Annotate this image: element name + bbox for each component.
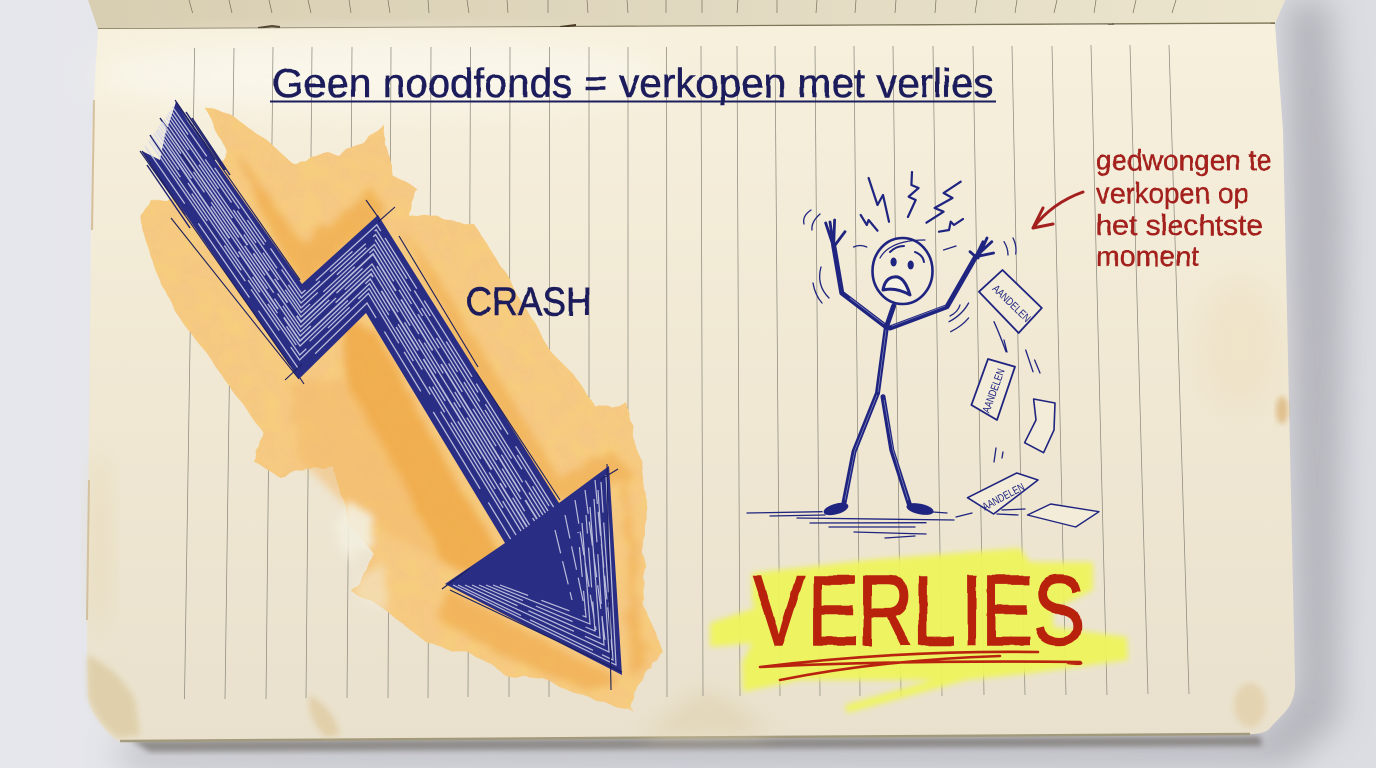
red annotation	[1096, 145, 1272, 273]
red annotation: verkopen op	[1096, 178, 1249, 210]
falling paper: blank	[1025, 399, 1055, 453]
body pen highlights	[845, 298, 945, 500]
figure body	[834, 245, 976, 505]
ground scribbles	[747, 509, 1025, 538]
title: Geen noodfonds = verkopen met verlies	[272, 60, 994, 106]
red underline strokes	[760, 652, 1081, 680]
red annotation: gedwongen te	[1096, 145, 1272, 177]
red annotation: het slechtste	[1096, 210, 1263, 242]
feet	[823, 501, 934, 517]
ruled vertical lines	[184, 45, 1189, 699]
hands	[826, 220, 994, 258]
label: crash: CRASH	[466, 280, 592, 324]
arrow hatch highlights	[145, 107, 554, 539]
panicking stick figure	[747, 172, 1040, 538]
crash arrow	[140, 100, 622, 690]
fallen paper: shares 3: AANDELEN	[980, 481, 1027, 513]
head and face	[872, 238, 932, 304]
orange watercolor wash	[137, 110, 664, 710]
tail spikes	[142, 102, 230, 228]
arrow head hatching	[453, 475, 616, 665]
falling paper: shares 2	[971, 359, 1015, 420]
red annotation: moment	[1096, 241, 1199, 273]
fallen paper: blank	[1028, 504, 1099, 527]
falling paper: shares 1: AANDELEN	[990, 283, 1033, 325]
red arrow to figure	[1033, 192, 1083, 228]
arrow body	[142, 102, 622, 675]
falling paper: shares 1	[979, 270, 1042, 333]
stress lightning bolts	[861, 172, 963, 232]
loose pen strokes	[140, 100, 622, 690]
previous notebook page	[88, 0, 1285, 29]
paper stains	[87, 40, 1288, 738]
motion marks	[804, 210, 1040, 462]
falling paper: shares 2: AANDELEN	[981, 367, 1008, 415]
yellow highlighter	[710, 548, 1128, 713]
verlies heading: VERLIES	[753, 556, 1085, 667]
